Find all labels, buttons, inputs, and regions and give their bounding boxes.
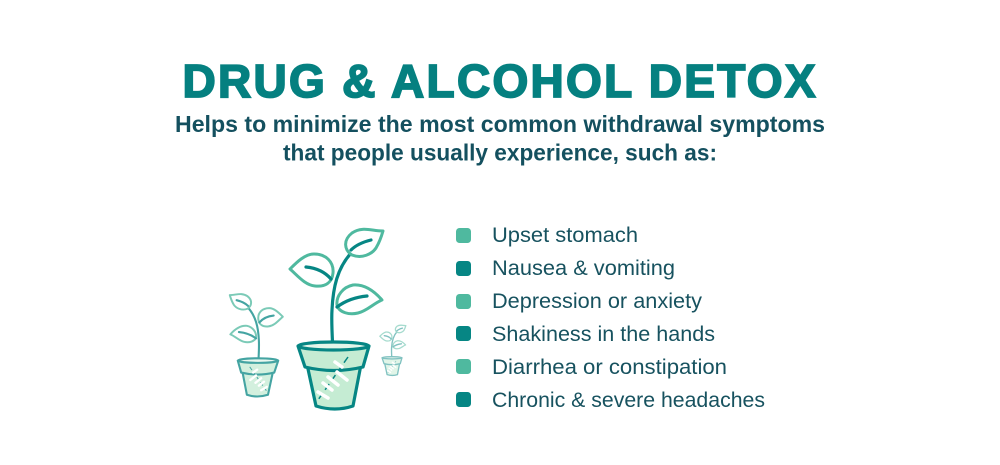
icon: medium plant in cracked pot <box>230 294 283 397</box>
item: depression or anxiety: Depression or anxiety <box>492 290 703 313</box>
item: diarrhea or constipation: Diarrhea or constipation <box>492 356 727 379</box>
item: shakiness in the hands: Shakiness in the hands <box>492 323 715 346</box>
icon: small plant in cracked pot <box>380 325 406 375</box>
item: upset stomach: Upset stomach <box>492 224 638 247</box>
title: DRUG & ALCOHOL DETOX <box>182 55 816 107</box>
subtitle <box>175 111 825 166</box>
illustration: potted plants <box>230 229 406 409</box>
icon: large plant in cracked pot <box>290 229 383 409</box>
subtitle: Helps to minimize the most common withdrawal symptoms <box>175 111 825 137</box>
symptom list <box>456 224 765 412</box>
item: chronic and severe headaches: Chronic & severe headaches <box>492 389 765 412</box>
item: nausea and vomiting: Nausea & vomiting <box>492 257 675 280</box>
subtitle: that people usually experience, such as: <box>283 140 717 166</box>
